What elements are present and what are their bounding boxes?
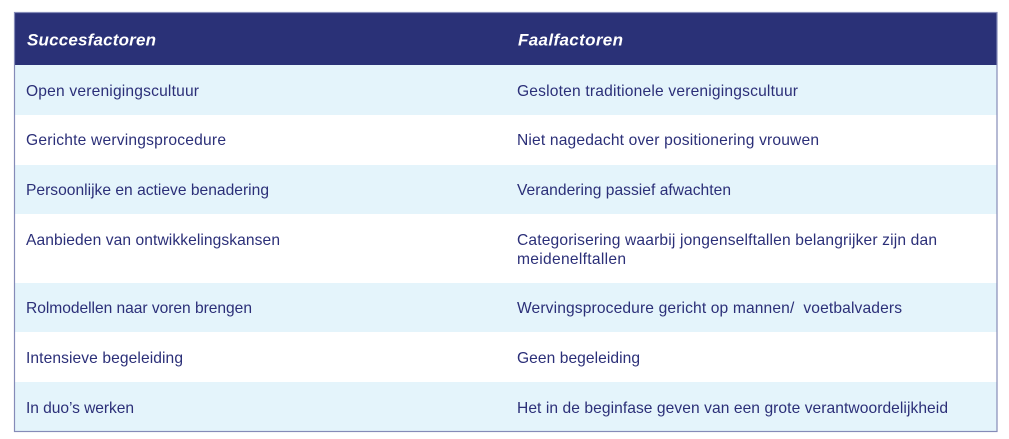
heading: Faalfactoren: Faalfactoren [518, 30, 623, 50]
row 2: Gerichte wervingsprocedure [26, 132, 226, 149]
row 1: Gesloten traditionele verenigingscultuur [517, 83, 798, 100]
row 6: Intensieve begeleiding [26, 350, 183, 367]
row 1 [15, 65, 997, 115]
row 3 [15, 165, 997, 214]
row 5: Rolmodellen naar voren brengen [26, 300, 252, 317]
row 3: Persoonlijke en actieve benadering [26, 182, 269, 199]
row 4 [15, 214, 997, 283]
row 4: meidenelftallen [517, 251, 626, 268]
heading: Succesfactoren: Succesfactoren [27, 30, 156, 50]
header row [15, 13, 997, 65]
row 5: Wervingsprocedure gericht op mannen/ voetbalvaders [517, 300, 902, 317]
row 4: Categorisering waarbij jongenselftallen belangrijker zijn dan [517, 232, 937, 249]
row 2: Niet nagedacht over positionering vrouwen [517, 132, 819, 149]
row 7: Het in de beginfase geven van een grote verantwoordelijkheid [517, 400, 948, 417]
row 2 [15, 115, 997, 165]
row 3: Verandering passief afwachten [517, 182, 731, 199]
row 6: Geen begeleiding [517, 350, 640, 367]
row 7 [15, 382, 997, 431]
row 7: In duo’s werken [26, 400, 134, 417]
row 5 [15, 283, 997, 332]
row 6 [15, 332, 997, 382]
row 1: Open verenigingscultuur [26, 83, 199, 100]
row 4: Aanbieden van ontwikkelingskansen [26, 232, 280, 249]
